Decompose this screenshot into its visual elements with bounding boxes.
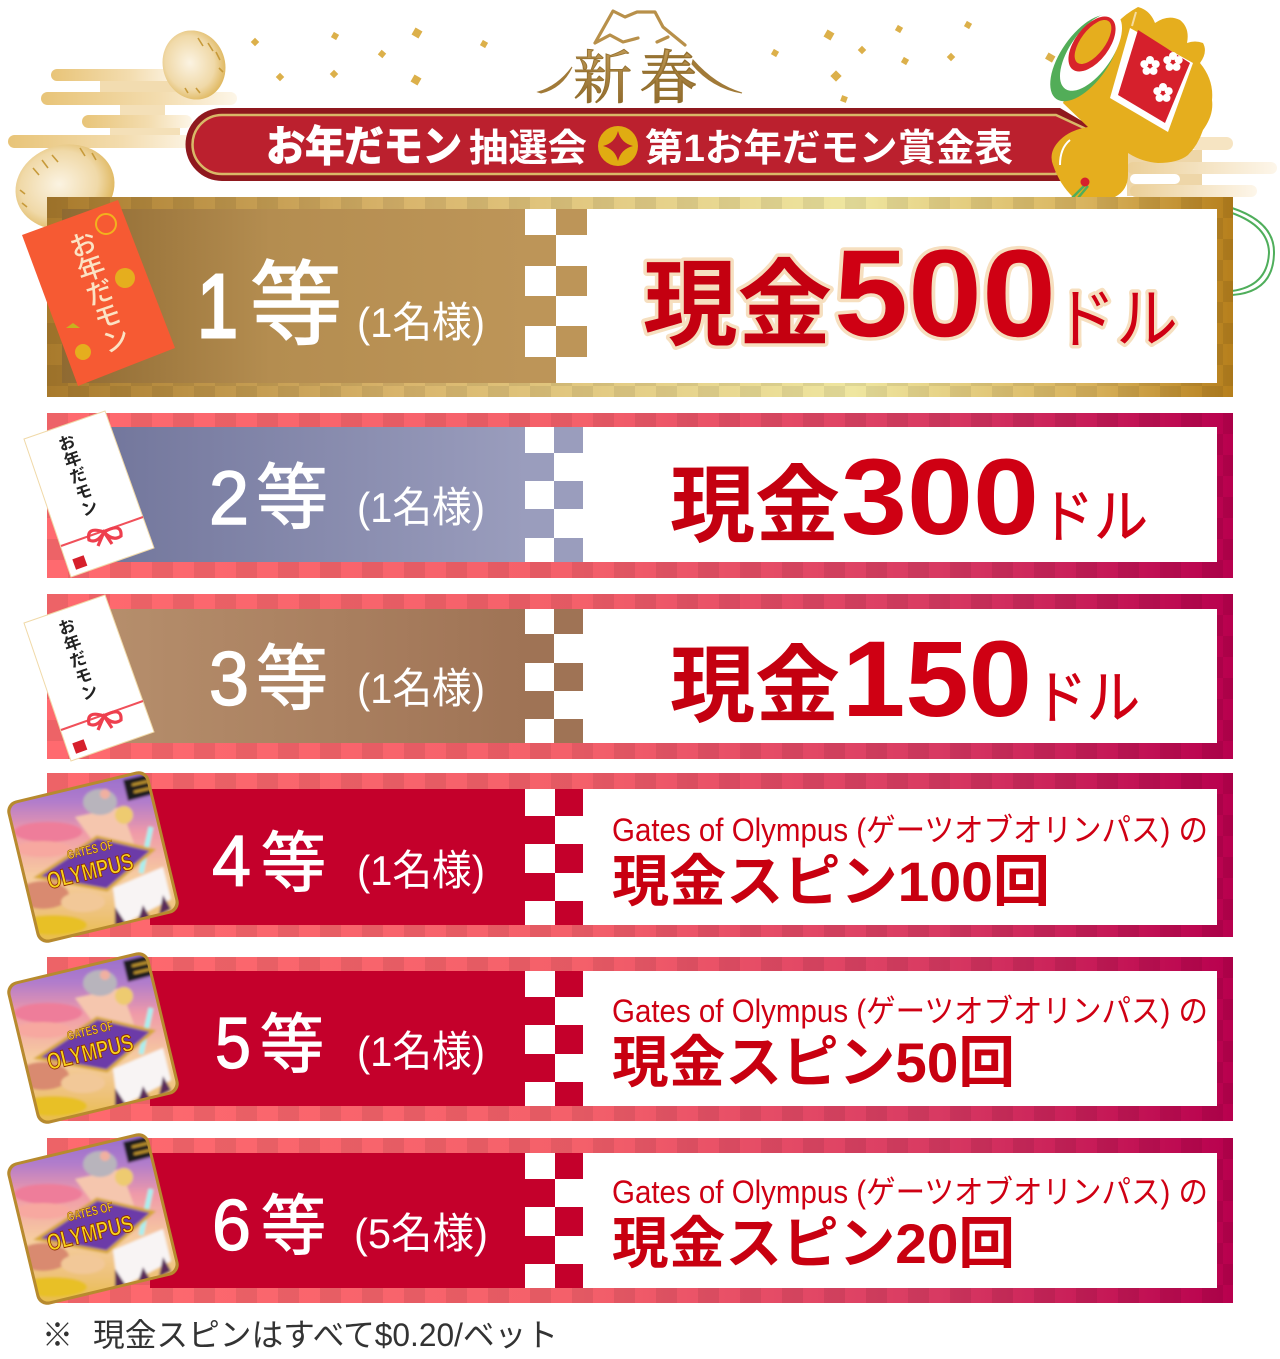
- icon: white noshi envelope 3: お年だモン: [53, 616, 99, 703]
- rank label: 2: [209, 456, 249, 541]
- icon: green cord: [1232, 208, 1274, 295]
- panel: 6th prize: 等: [261, 1189, 326, 1263]
- rank label: 5: [215, 1004, 251, 1084]
- panel: 1st prize: [47, 197, 1233, 397]
- prize amount: [670, 436, 1148, 557]
- winners count: (1名様): [357, 847, 485, 894]
- prize amount: 300: [841, 436, 1039, 557]
- image: game card 4: GATES OF: [65, 837, 115, 862]
- winners count: (1名様): [357, 299, 485, 346]
- heading mark: Mt. Fuji and shinshun: 新: [573, 46, 632, 111]
- prize amount: 150: [842, 618, 1032, 739]
- prize spins: 現金スピン20回: [612, 1212, 1015, 1275]
- prize amount: [643, 225, 1178, 363]
- title banner: [186, 108, 1092, 181]
- heading mark: Mt. Fuji and shinshun: 春: [640, 46, 697, 111]
- game name: Gates of Olympus (ゲーツオブオリンパス) の: [612, 812, 1208, 848]
- icon: white noshi envelope 2: [24, 411, 154, 577]
- rice cake lower: [6, 133, 124, 241]
- winners count: (5名様): [354, 1210, 488, 1257]
- panel: 5th prize: [47, 957, 1233, 1121]
- prize amount: ドル: [1054, 282, 1178, 356]
- banner title: campaign name: お年だモン: [266, 123, 462, 170]
- panel: 2nd prize: 等: [256, 459, 328, 539]
- panel: 6th prize: [47, 1138, 1233, 1303]
- prize amount: [670, 618, 1140, 739]
- icon: red envelope tag: [22, 200, 175, 386]
- winners count: (1名様): [357, 1028, 485, 1075]
- game name: Gates of Olympus (ゲーツオブオリンパス) の: [612, 993, 1208, 1029]
- footnote: ※: [42, 1317, 73, 1353]
- winners count: (1名様): [357, 484, 485, 531]
- rank label: 1: [197, 257, 238, 357]
- image: game card 5: OLYMPUS: [44, 1029, 136, 1076]
- heading mark: Mt. Fuji and shinshun: [538, 11, 742, 111]
- prize amount: ドル: [1034, 666, 1140, 731]
- rank label: 3: [209, 637, 249, 722]
- gold clouds right: [1127, 137, 1277, 197]
- prize spins: 現金スピン100回: [612, 850, 1050, 913]
- rice cake upper: [153, 22, 235, 108]
- panel: 3rd prize: [47, 594, 1233, 759]
- rank label: 6: [212, 1186, 251, 1266]
- image: game card 4: [7, 771, 179, 943]
- panel: 2nd prize: [47, 413, 1233, 578]
- image: game card 6: GATES OF: [65, 1199, 115, 1224]
- rank label: 4: [212, 822, 251, 902]
- image: game card 6: [7, 1133, 179, 1305]
- banner title: prize table: 第1お年だモン賞金表: [645, 128, 1013, 170]
- gold flecks: [251, 21, 1055, 103]
- icon: golden lion mascot: [1037, 3, 1212, 198]
- panel: 1st prize: 等: [250, 255, 342, 357]
- icon: white noshi envelope 3: [24, 595, 154, 761]
- image: game card 4: OLYMPUS: [44, 848, 136, 895]
- winners count: (1名様): [357, 665, 485, 712]
- image: game card 5: GATES OF: [65, 1018, 115, 1043]
- panel: 4th prize: 等: [261, 826, 326, 900]
- icon: white noshi envelope 2: お年だモン: [53, 432, 99, 519]
- gold clouds left: [8, 69, 237, 148]
- prize amount: 現金: [670, 459, 840, 553]
- image: game card 5: [7, 952, 179, 1124]
- panel: 5th prize: 等: [260, 1008, 324, 1081]
- prize amount: ドル: [1040, 485, 1148, 550]
- prize amount: 現金: [670, 639, 840, 733]
- prize spins: 現金スピン50回: [612, 1031, 1015, 1094]
- footnote: 現金スピンはすべて$0.20/ベット: [93, 1317, 558, 1353]
- banner title: lottery: 抽選会: [469, 128, 587, 170]
- game name: Gates of Olympus (ゲーツオブオリンパス) の: [612, 1174, 1208, 1210]
- image: game card 6: OLYMPUS: [44, 1210, 136, 1257]
- panel: 3rd prize: 等: [256, 640, 328, 720]
- prize amount: 500: [834, 225, 1056, 363]
- icon: red envelope tag: お年だモン: [62, 227, 132, 358]
- panel: 4th prize: [47, 773, 1233, 937]
- icon: gold coin: [598, 126, 638, 166]
- prize amount: 現金: [643, 252, 832, 357]
